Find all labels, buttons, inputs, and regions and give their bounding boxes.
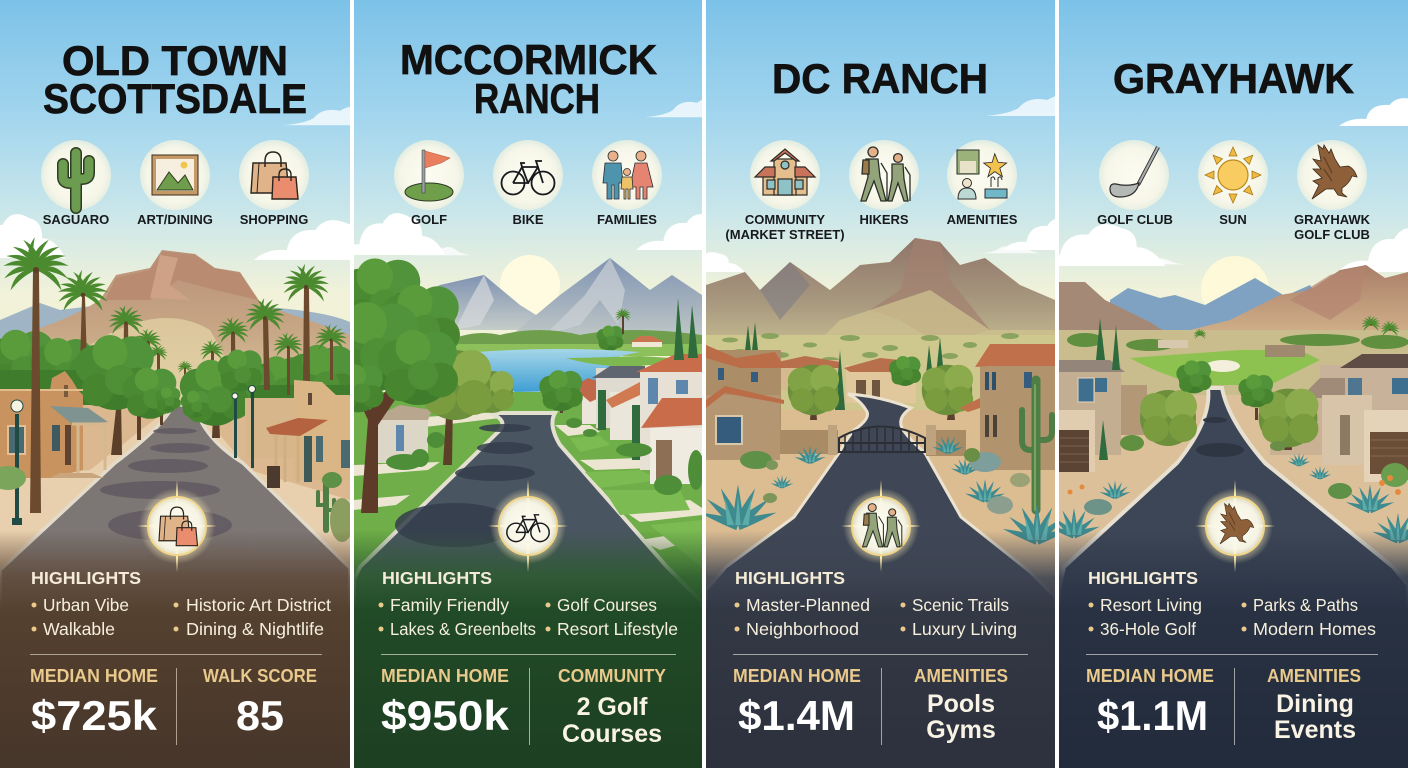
icon labels: GRAYHAWK: [1294, 212, 1371, 227]
highlights: Urban Vibe: [43, 595, 129, 615]
icon labels: [411, 212, 657, 227]
highlights: HIGHLIGHTS: [31, 568, 141, 588]
icon labels: GOLF CLUB: [1097, 212, 1173, 227]
mountain: [0, 250, 350, 420]
ground: [706, 410, 1055, 620]
highlights: Neighborhood: [746, 619, 859, 639]
stats: [381, 654, 676, 748]
desert plants: [1047, 435, 1408, 543]
cactus and shrubs: [0, 466, 354, 542]
stats: Pools: [927, 690, 995, 718]
title: [400, 36, 657, 122]
clouds: [0, 107, 393, 260]
icon labels: [1097, 212, 1371, 242]
far shoreline: [440, 308, 702, 356]
road and gate: [706, 394, 1055, 768]
stats: MEDIAN HOME: [733, 666, 861, 686]
lawn patches right: [570, 436, 702, 550]
icon labels: SAGUARO: [43, 212, 109, 227]
big shade tree: [354, 258, 460, 513]
icon labels: [725, 212, 1018, 242]
stats: MEDIAN HOME: [30, 666, 158, 686]
icon labels: (MARKET STREET): [725, 227, 845, 242]
desert flat: [706, 333, 1055, 415]
street lamps: [11, 386, 256, 525]
highlights: Family Friendly: [390, 595, 509, 615]
stats: Dining: [1276, 690, 1354, 718]
stats: [733, 654, 1028, 745]
mountains: [437, 258, 702, 335]
fade overlay: [1059, 530, 1408, 768]
icon: community building: [750, 140, 820, 210]
medallion: bike: [488, 480, 568, 572]
stats: AMENITIES: [1267, 666, 1361, 686]
icon labels: AMENITIES: [947, 212, 1018, 227]
houses left: [375, 405, 432, 463]
icon: amenities: [947, 140, 1017, 210]
highlights: [1088, 568, 1376, 639]
highlights: 36-Hole Golf: [1100, 619, 1196, 639]
panel: Old Town Scottsdale: [0, 0, 350, 768]
icon: bike: [493, 140, 563, 210]
stats: MEDIAN HOME: [1086, 666, 1214, 686]
title: RANCH: [474, 75, 600, 122]
icon: art frame: [140, 140, 210, 210]
icon labels: SUN: [1219, 212, 1247, 227]
highlights: Historic Art District: [186, 595, 331, 615]
icon: shopping bags: [239, 140, 309, 210]
icon labels: COMMUNITY: [745, 212, 825, 227]
icon: hikers: [849, 140, 919, 210]
tree: lake: [484, 370, 583, 413]
medallion: hawk: [1195, 480, 1275, 572]
highlights: Modern Homes: [1253, 619, 1376, 639]
fade overlay: [0, 530, 350, 768]
saguaro: [1022, 380, 1052, 510]
cypress trees: [744, 322, 945, 410]
title: MCCORMICK: [400, 36, 657, 83]
stats: Courses: [562, 720, 662, 748]
title: DC RANCH: [772, 55, 988, 102]
lawn: [354, 356, 702, 600]
highlights: Resort Lifestyle: [557, 619, 678, 639]
stone house right: [960, 344, 1055, 470]
street trees: [75, 335, 262, 455]
icon labels: [43, 214, 308, 224]
olive tree: [420, 350, 491, 465]
stats: 85: [236, 692, 284, 739]
title: OLD TOWN: [62, 37, 288, 84]
icon: golf club: [1099, 140, 1169, 210]
icon labels: GOLF: [411, 212, 447, 227]
house right: [1270, 354, 1408, 482]
building: adobe left: [0, 371, 108, 478]
highlights: Walkable: [43, 619, 115, 639]
stats: AMENITIES: [914, 666, 1008, 686]
sidewalks: [354, 412, 702, 550]
icon: hawk: [1297, 140, 1367, 210]
highlights: [31, 568, 331, 639]
road shadows: [395, 424, 535, 547]
stats: $725k: [31, 692, 158, 739]
icon labels: SHOPPING: [240, 212, 308, 227]
highlights: [734, 568, 1017, 639]
distant village: [778, 356, 920, 403]
stats: $1.1M: [1097, 692, 1208, 739]
icon labels: FAMILIES: [597, 212, 657, 227]
icon labels: GOLF CLUB: [1294, 227, 1370, 242]
road: [1059, 388, 1408, 768]
stats: 2 Golf: [577, 693, 648, 721]
icon: golf flag: [394, 140, 464, 210]
mountains: [1059, 265, 1408, 345]
panel: McCormick Ranch: [354, 0, 702, 768]
building: adobe right: [245, 380, 350, 482]
fade overlay: [706, 530, 1055, 768]
medallion: hikers: [841, 480, 921, 572]
stone house left: [706, 345, 785, 460]
stats: [30, 654, 322, 745]
road: [354, 411, 696, 594]
house left: [1059, 318, 1147, 472]
icon labels: ART/DINING: [137, 212, 213, 227]
icon labels: BIKE: [512, 212, 544, 227]
icon labels: HIKERS: [859, 212, 909, 227]
highlights: Lakes & Greenbelts: [390, 619, 536, 639]
fade overlay: [354, 530, 702, 768]
lake: [476, 349, 652, 392]
highlights: [378, 568, 678, 639]
palm trees: [58, 264, 347, 395]
sun: [500, 255, 560, 315]
stats: WALK SCORE: [203, 666, 317, 686]
ground and sidewalks: [81, 405, 350, 500]
highlights: Dining & Nightlife: [186, 619, 324, 639]
highlights: Scenic Trails: [912, 595, 1009, 615]
title: SCOTTSDALE: [43, 75, 307, 122]
icon: saguaro: [41, 140, 111, 210]
panel: Grayhawk: [1027, 0, 1408, 768]
highlights: Resort Living: [1100, 595, 1202, 615]
trees: [1140, 360, 1318, 450]
highlights: HIGHLIGHTS: [382, 568, 492, 588]
clouds: [1027, 98, 1408, 272]
medallion: shopping bag: [137, 480, 217, 572]
gate: [838, 426, 925, 453]
highlights: Parks & Paths: [1253, 595, 1358, 615]
stats: Events: [1274, 716, 1356, 744]
highlights: Master-Planned: [746, 595, 870, 615]
title: GRAYHAWK: [1113, 55, 1354, 102]
icon: sun: [1198, 140, 1268, 210]
stats: [1086, 654, 1378, 745]
street: [0, 404, 350, 594]
title: [44, 46, 306, 114]
panel: DC Ranch: [669, 0, 1105, 768]
big palm: [2, 237, 70, 513]
walls: [780, 425, 966, 456]
golf course: [1059, 315, 1408, 420]
clouds: [669, 95, 1105, 272]
stats: $1.4M: [738, 692, 855, 739]
highlights: Luxury Living: [912, 619, 1017, 639]
mountains: [706, 238, 1055, 360]
stats: Gyms: [926, 716, 996, 744]
highlights: Golf Courses: [557, 595, 657, 615]
agave and desert plants: [698, 436, 1073, 545]
stats: $950k: [381, 692, 510, 739]
houses right: [578, 298, 702, 484]
shrubs: [386, 418, 704, 495]
ground: [1059, 395, 1408, 620]
stats: MEDIAN HOME: [381, 666, 509, 686]
sun: [1201, 256, 1269, 324]
clouds: [332, 99, 750, 255]
stats: COMMUNITY: [558, 666, 666, 686]
icon: family: [592, 140, 662, 210]
highlights: HIGHLIGHTS: [735, 568, 845, 588]
desert trees: [788, 356, 973, 420]
highlights: HIGHLIGHTS: [1088, 568, 1198, 588]
background tree line: [0, 330, 350, 405]
